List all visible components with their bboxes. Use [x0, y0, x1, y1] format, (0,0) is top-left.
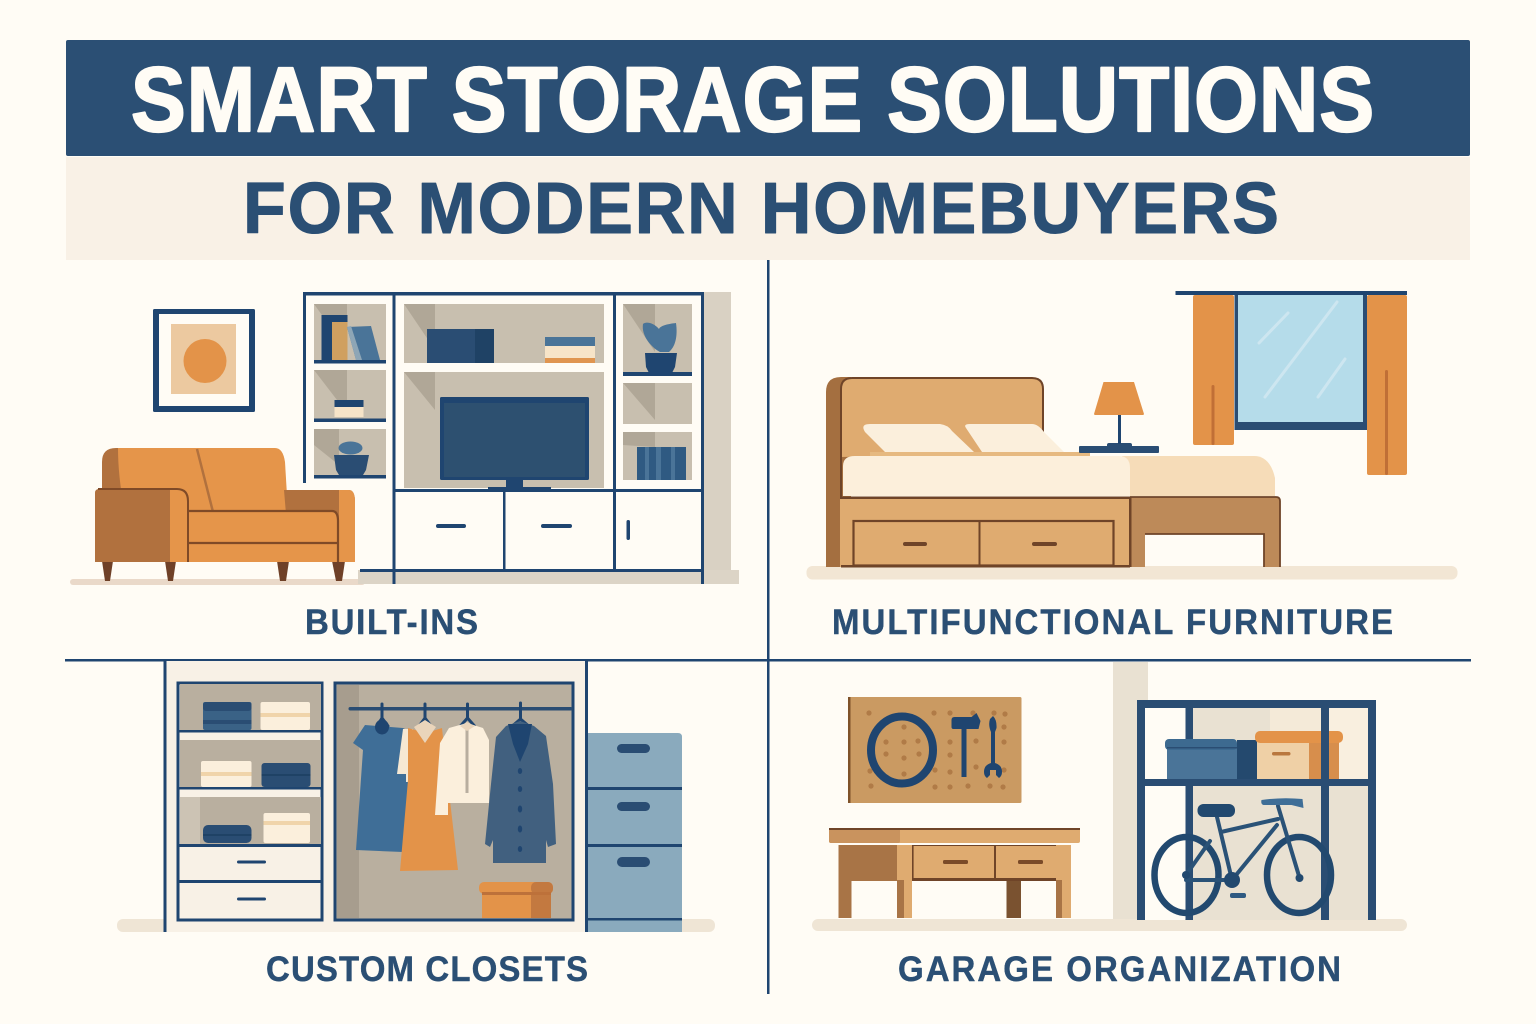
folded navy stacks: [203, 702, 310, 843]
shelving unit: [303, 292, 704, 584]
hammer: [952, 713, 980, 777]
left shelves: [314, 304, 386, 478]
wrench: [984, 716, 1002, 778]
floor: [806, 566, 1458, 580]
label: built-ins: BUILT-INS: [305, 603, 478, 642]
right shelves: [623, 304, 692, 480]
wall art: [153, 309, 255, 412]
tan box: [1255, 731, 1343, 779]
bicycle: [1154, 798, 1331, 913]
ring tool: [871, 716, 933, 784]
cream shirt: [435, 722, 489, 815]
bed: [826, 377, 1280, 568]
panel: built-ins: [70, 292, 739, 642]
storage base: [840, 498, 1130, 567]
hanging section: [335, 683, 573, 920]
drawers: [854, 521, 1114, 566]
rod: [348, 707, 572, 710]
wall column and floor: [70, 292, 739, 585]
cream blouse behind orange dress: [397, 729, 413, 782]
label: custom closets: CUSTOM CLOSETS: [266, 950, 588, 989]
title banner: SMART STORAGE SOLUTIONS: [131, 49, 1374, 151]
hangers: [377, 703, 528, 726]
blue dress: [353, 720, 410, 852]
subtitle band: FOR MODERN HOMEBUYERS: [243, 168, 1279, 249]
orange dress: [400, 720, 458, 871]
panel: multifunctional furniture: [806, 291, 1458, 642]
window with curtains: [1176, 291, 1407, 475]
drawer handles: [237, 860, 266, 900]
panel: custom closets: [117, 661, 715, 989]
label: multifunctional furniture: MULTIFUNCTIONAL FURNITURE: [832, 603, 1393, 642]
closet side lines: [164, 661, 588, 932]
blue bin: [1165, 739, 1257, 779]
left shelving column: [178, 683, 322, 920]
subtitle band: [66, 157, 1470, 260]
floor: [117, 919, 715, 932]
cabinet frame lines: [303, 292, 704, 584]
center shelves: [404, 304, 604, 488]
metal shelving: [1137, 700, 1376, 920]
television: [440, 397, 589, 491]
floor and wall column: [812, 662, 1407, 931]
closet backdrop: [165, 661, 586, 932]
cabinet handles: [436, 520, 630, 540]
workbench: [829, 828, 1080, 918]
filing cabinet: [588, 733, 682, 932]
navy coat: [485, 721, 556, 863]
folded cream stacks: [201, 702, 310, 843]
nightstand lamp: [1079, 382, 1159, 453]
sofa: [95, 448, 355, 581]
pillows: [863, 424, 974, 452]
panel: garage organization: [812, 662, 1407, 989]
mattress: [1122, 456, 1275, 496]
sofa legs: [102, 561, 345, 581]
storage box: [479, 882, 553, 918]
label: garage organization: GARAGE ORGANIZATION: [898, 950, 1341, 989]
pegboard: [848, 697, 1022, 803]
headboard: [826, 377, 851, 567]
